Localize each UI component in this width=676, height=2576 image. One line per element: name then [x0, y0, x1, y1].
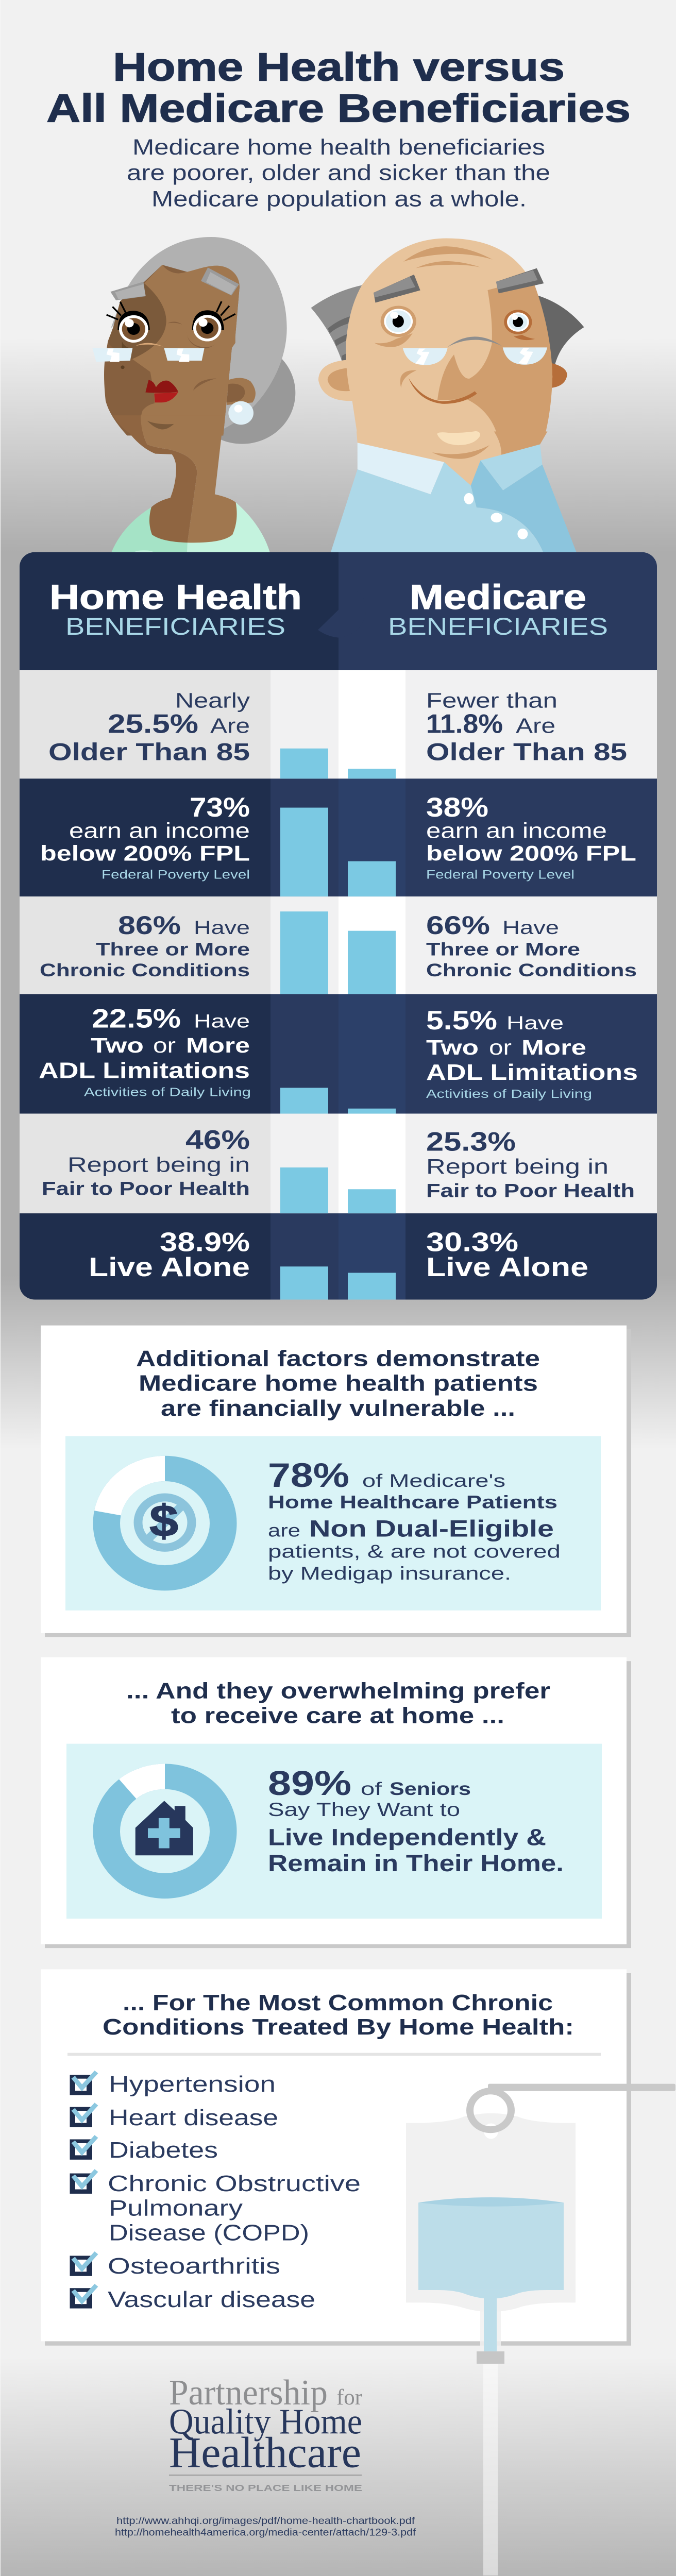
header: home health: Home Health — [49, 578, 302, 617]
heading: ... And they overwhelming prefer — [126, 1679, 550, 1703]
row 4 right: ADL limitations — [426, 1006, 638, 1101]
panel: chronic conditions card — [41, 1969, 631, 2346]
source references — [115, 2516, 416, 2538]
text: 89% statistic: Live Independently & — [268, 1824, 546, 1850]
icon: checkbox heart disease — [70, 2104, 96, 2127]
man glasses — [403, 336, 547, 365]
text: 78% statistic: by Medigap insurance. — [268, 1563, 511, 1584]
row 3 left: chronic conditions: Three or More — [96, 939, 250, 959]
row 4 left: ADL limitations: More — [186, 1033, 250, 1057]
text: 89% statistic — [268, 1764, 564, 1876]
heading: are financially vulnerable ... — [161, 1396, 515, 1421]
row 6 left: live alone: Live Alone — [89, 1253, 250, 1282]
row 4 right: ADL limitations: More — [521, 1036, 586, 1059]
row 3 left: chronic conditions — [40, 910, 250, 980]
row 1 right: older than 85: 11.8% — [426, 709, 503, 739]
text: 89% statistic: Remain in Their Home. — [268, 1850, 564, 1876]
header: medicare: BENEFICIARIES — [388, 613, 608, 640]
panel: prefer care at home card — [41, 1657, 631, 1948]
panel header background — [20, 552, 657, 670]
logo: Partnership for Quality Home Healthcare: for — [336, 2384, 362, 2410]
row 5 left: fair to poor health — [42, 1126, 250, 1199]
logo: Partnership for Quality Home Healthcare: Healthcare — [169, 2428, 361, 2477]
text: 78% statistic — [268, 1457, 561, 1584]
row 3 right: chronic conditions — [426, 910, 637, 980]
row backgrounds — [20, 670, 657, 1300]
logo: Partnership for Quality Home Healthcare: Quality Home — [169, 2402, 362, 2442]
row 2 left: income: earn an income — [69, 819, 250, 843]
text: 78% statistic: Non Dual-Eligible — [309, 1516, 554, 1541]
text: 78% statistic: of Medicare's — [362, 1470, 505, 1491]
source references: http://homehealth4america.org/media-center/attach/129-3.pdf — [115, 2527, 416, 2538]
row 5 right: fair to poor health: Report being in — [426, 1155, 609, 1178]
row 1 left: older than 85 — [48, 689, 250, 766]
checklist: Chronic Obstructive — [108, 2172, 361, 2196]
header: home health — [49, 578, 302, 640]
row 4 right: ADL limitations: Two — [426, 1036, 479, 1059]
icon: crossed out dollar — [138, 1496, 192, 1548]
man eyebrows — [374, 268, 544, 303]
woman lips — [145, 380, 178, 402]
row 4 right: ADL limitations: Have — [506, 1012, 564, 1034]
row 6 right: live alone: Live Alone — [426, 1253, 588, 1282]
icon: crossed out dollar: $ — [149, 1496, 178, 1546]
row 4 left: ADL limitations: ADL Limitations — [39, 1059, 250, 1083]
woman ear and earring — [227, 378, 256, 425]
row 3 right: chronic conditions: 66% — [426, 910, 490, 939]
panel: financially vulnerable card — [41, 1326, 631, 1637]
heading — [103, 1991, 574, 2040]
donut chart 89% — [107, 1776, 223, 1886]
row 4 right: ADL limitations: Activities of Daily Living — [426, 1088, 592, 1101]
row 4 left: ADL limitations: 22.5% — [92, 1004, 181, 1033]
man left eye — [375, 306, 416, 347]
row 1 right: older than 85 — [426, 689, 627, 766]
row 2 right: income: Federal Poverty Level — [426, 868, 574, 882]
row 6 right: live alone: 30.3% — [426, 1228, 518, 1257]
checklist: Pulmonary — [109, 2196, 243, 2221]
row 5 left: fair to poor health: Fair to Poor Health — [42, 1178, 250, 1199]
woman eyebrows — [110, 267, 239, 300]
subtitle: are poorer, older and sicker than the — [127, 161, 550, 185]
row 5 right: fair to poor health: 25.3% — [426, 1127, 516, 1157]
row 2 right: income — [426, 792, 636, 882]
checklist: Disease (COPD) — [109, 2221, 309, 2245]
text: 78% statistic: 78% — [268, 1457, 349, 1494]
text: 89% statistic: of — [361, 1778, 382, 1799]
heading: to receive care at home ... — [171, 1704, 504, 1728]
row 1 left: older than 85: Are — [210, 714, 250, 737]
woman sweater — [111, 502, 270, 577]
checklist: Diabetes — [109, 2138, 218, 2163]
logo: Partnership for Quality Home Healthcare — [169, 2372, 362, 2493]
icon: checkbox COPD — [70, 2171, 96, 2194]
text: 78% statistic: Home Healthcare Patients — [268, 1492, 557, 1512]
row 4 left: ADL limitations: Have — [194, 1011, 250, 1032]
heading — [126, 1679, 550, 1728]
header: home health: BENEFICIARIES — [65, 613, 285, 640]
row 1 left: older than 85: Older Than 85 — [48, 739, 250, 766]
row 2 left: income: Federal Poverty Level — [102, 868, 250, 882]
text: 89% statistic: Say They Want to — [268, 1799, 460, 1821]
woman left eye — [107, 302, 150, 343]
row 4 left: ADL limitations — [39, 1004, 251, 1099]
row 1 left: older than 85: 25.5% — [108, 709, 198, 739]
donut chart 78% — [107, 1468, 223, 1578]
heading: Medicare home health patients — [139, 1371, 538, 1396]
header: medicare: Medicare — [410, 578, 586, 617]
row 3 left: chronic conditions: 86% — [118, 910, 181, 939]
title: All Medicare Beneficiaries — [46, 86, 631, 130]
title: Home Health versus — [113, 45, 565, 89]
row 6 left: live alone — [89, 1228, 250, 1282]
man right eye — [504, 310, 535, 340]
man smile — [400, 370, 477, 404]
icon: house with cross — [136, 1801, 193, 1855]
row 5 left: fair to poor health: 46% — [185, 1126, 250, 1155]
row 2 right: income: earn an income — [426, 819, 607, 843]
row 4 left: ADL limitations: Activities of Daily Living — [84, 1086, 251, 1099]
woman right eye — [192, 301, 235, 342]
row 3 left: chronic conditions: Have — [194, 917, 250, 938]
row 3 left: chronic conditions: Chronic Conditions — [40, 960, 250, 980]
row 3 right: chronic conditions: Chronic Conditions — [426, 960, 637, 980]
checklist — [70, 2072, 361, 2312]
text: 78% statistic: are — [268, 1520, 300, 1540]
subtitle — [127, 135, 550, 211]
icon: IV bag and tube — [406, 2084, 675, 2575]
icon: checkbox osteoarthritis — [70, 2253, 96, 2276]
subtitle: Medicare home health beneficiaries — [132, 135, 545, 160]
row 5 left: fair to poor health: Report being in — [67, 1153, 250, 1176]
woman glasses — [92, 348, 205, 362]
logo: Partnership for Quality Home Healthcare: THERE'S NO PLACE LIKE HOME — [169, 2483, 362, 2493]
bar chart: paired bars — [280, 749, 396, 1300]
title — [46, 45, 631, 130]
header: medicare — [388, 578, 608, 640]
row 2 left: income: 73% — [190, 792, 250, 823]
checklist: Osteoarthritis — [108, 2254, 280, 2279]
icon: checkbox vascular disease — [70, 2285, 96, 2309]
subtitle: Medicare population as a whole. — [151, 188, 527, 211]
checklist: Heart disease — [109, 2106, 278, 2130]
checklist: Hypertension — [109, 2072, 276, 2097]
row 5 right: fair to poor health: Fair to Poor Health — [426, 1180, 635, 1201]
man shirt — [331, 443, 577, 577]
row 1 right: older than 85: Older Than 85 — [426, 739, 627, 766]
row 2 right: income: below 200% FPL — [426, 842, 636, 866]
row 3 right: chronic conditions: Three or More — [426, 939, 580, 959]
icon: checkbox hypertension — [70, 2072, 96, 2095]
row 1 right: older than 85: Fewer than — [426, 689, 557, 712]
row 1 left: older than 85: Nearly — [175, 689, 250, 712]
row 6 right: live alone — [426, 1228, 588, 1282]
icon: checkbox diabetes — [70, 2137, 96, 2160]
row 4 right: ADL limitations: ADL Limitations — [426, 1060, 638, 1085]
row 4 left: ADL limitations: or — [153, 1033, 176, 1057]
heading: Conditions Treated By Home Health: — [103, 2015, 574, 2040]
text: 89% statistic: 89% — [268, 1764, 351, 1802]
row 5 right: fair to poor health — [426, 1127, 635, 1201]
heading — [136, 1347, 540, 1421]
heading: Additional factors demonstrate — [136, 1347, 540, 1371]
row 1 right: older than 85: Are — [516, 714, 555, 737]
checklist: Vascular disease — [108, 2287, 315, 2312]
panel: comparison table — [20, 552, 657, 1300]
text: 89% statistic: Seniors — [390, 1778, 471, 1799]
row 4 right: ADL limitations: or — [489, 1036, 512, 1059]
heading: ... For The Most Common Chronic — [123, 1991, 553, 2015]
row 3 right: chronic conditions: Have — [502, 917, 559, 938]
row 2 right: income: 38% — [426, 792, 488, 823]
row 6 left: live alone: 38.9% — [160, 1228, 250, 1257]
source references: http://www.ahhqi.org/images/pdf/home-health-chartbook.pdf — [116, 2516, 415, 2527]
row 2 left: income — [40, 792, 250, 882]
illustration: elderly woman — [92, 237, 295, 577]
logo: Partnership for Quality Home Healthcare: Partnership — [169, 2372, 328, 2413]
illustration: elderly man — [311, 239, 584, 577]
text: 78% statistic: patients, & are not covered — [268, 1541, 561, 1562]
row 4 left: ADL limitations: Two — [91, 1033, 144, 1057]
row 4 right: ADL limitations: 5.5% — [426, 1006, 497, 1036]
row 2 left: income: below 200% FPL — [40, 842, 250, 866]
